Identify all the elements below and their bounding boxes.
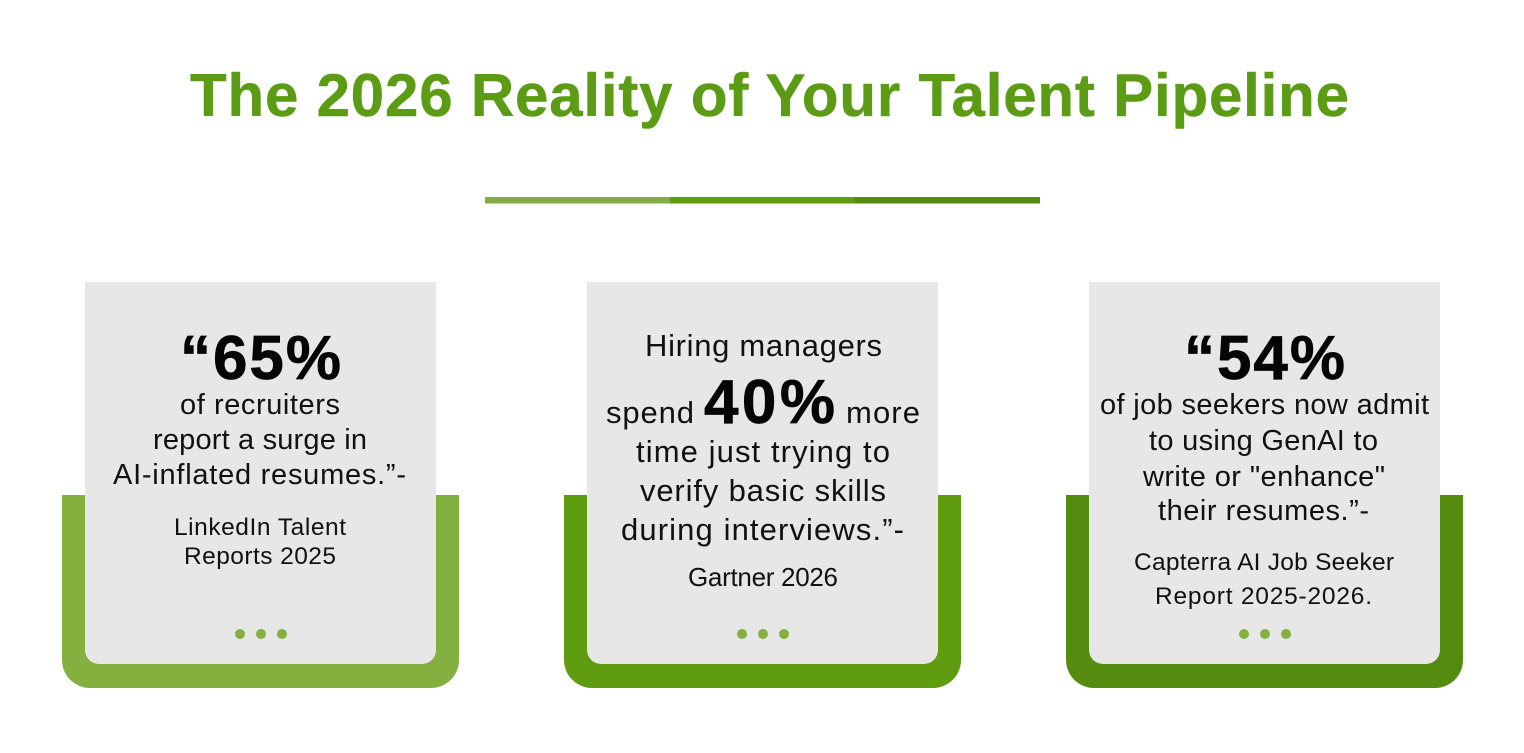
statistic 65%: “65% — [180, 324, 341, 393]
source: Gartner 2026 — [688, 562, 838, 592]
source: Reports 2025 — [184, 543, 336, 570]
panel: Capterra statistic — [1066, 282, 1463, 688]
quote text: AI-inflated resumes.”- — [113, 459, 406, 491]
divider bar — [485, 197, 1040, 204]
title: The 2026 Reality of Your Talent Pipeline — [190, 62, 1349, 129]
source: Report 2025-2026. — [1155, 583, 1372, 610]
dots — [235, 629, 287, 639]
quote text — [113, 389, 406, 491]
dots — [737, 629, 789, 639]
quote text: verify basic skills — [640, 473, 886, 508]
quote text: during interviews.”- — [621, 512, 904, 547]
statistic 54%: “54% — [1184, 324, 1345, 393]
quote text: to using GenAI to — [1149, 425, 1378, 457]
grey card — [85, 282, 436, 664]
quote text — [1100, 389, 1429, 527]
quote text: of recruiters — [180, 389, 340, 421]
quote text: of job seekers now admit — [1100, 389, 1429, 421]
source: LinkedIn Talent — [174, 514, 346, 541]
quote text: write or "enhance" — [1142, 461, 1385, 493]
green card base — [62, 495, 459, 688]
quote text: their resumes.”- — [1158, 495, 1369, 527]
quote text — [606, 328, 920, 547]
grey card — [587, 282, 938, 664]
quote text: spend — [606, 395, 694, 430]
dots — [1239, 629, 1291, 639]
source: Capterra AI Job Seeker — [1134, 549, 1394, 576]
source — [1134, 549, 1394, 610]
grey card — [1089, 282, 1440, 664]
quote text: more — [846, 395, 920, 430]
panel: LinkedIn statistic — [62, 282, 459, 688]
panel: Gartner statistic — [564, 282, 961, 688]
quote text: Hiring managers — [645, 328, 882, 363]
source — [174, 514, 346, 570]
green card base — [564, 495, 961, 688]
quote text: report a surge in — [153, 424, 367, 456]
quote text: time just trying to — [636, 434, 890, 469]
green card base — [1066, 495, 1463, 688]
statistic 40%: 40% — [704, 368, 835, 437]
